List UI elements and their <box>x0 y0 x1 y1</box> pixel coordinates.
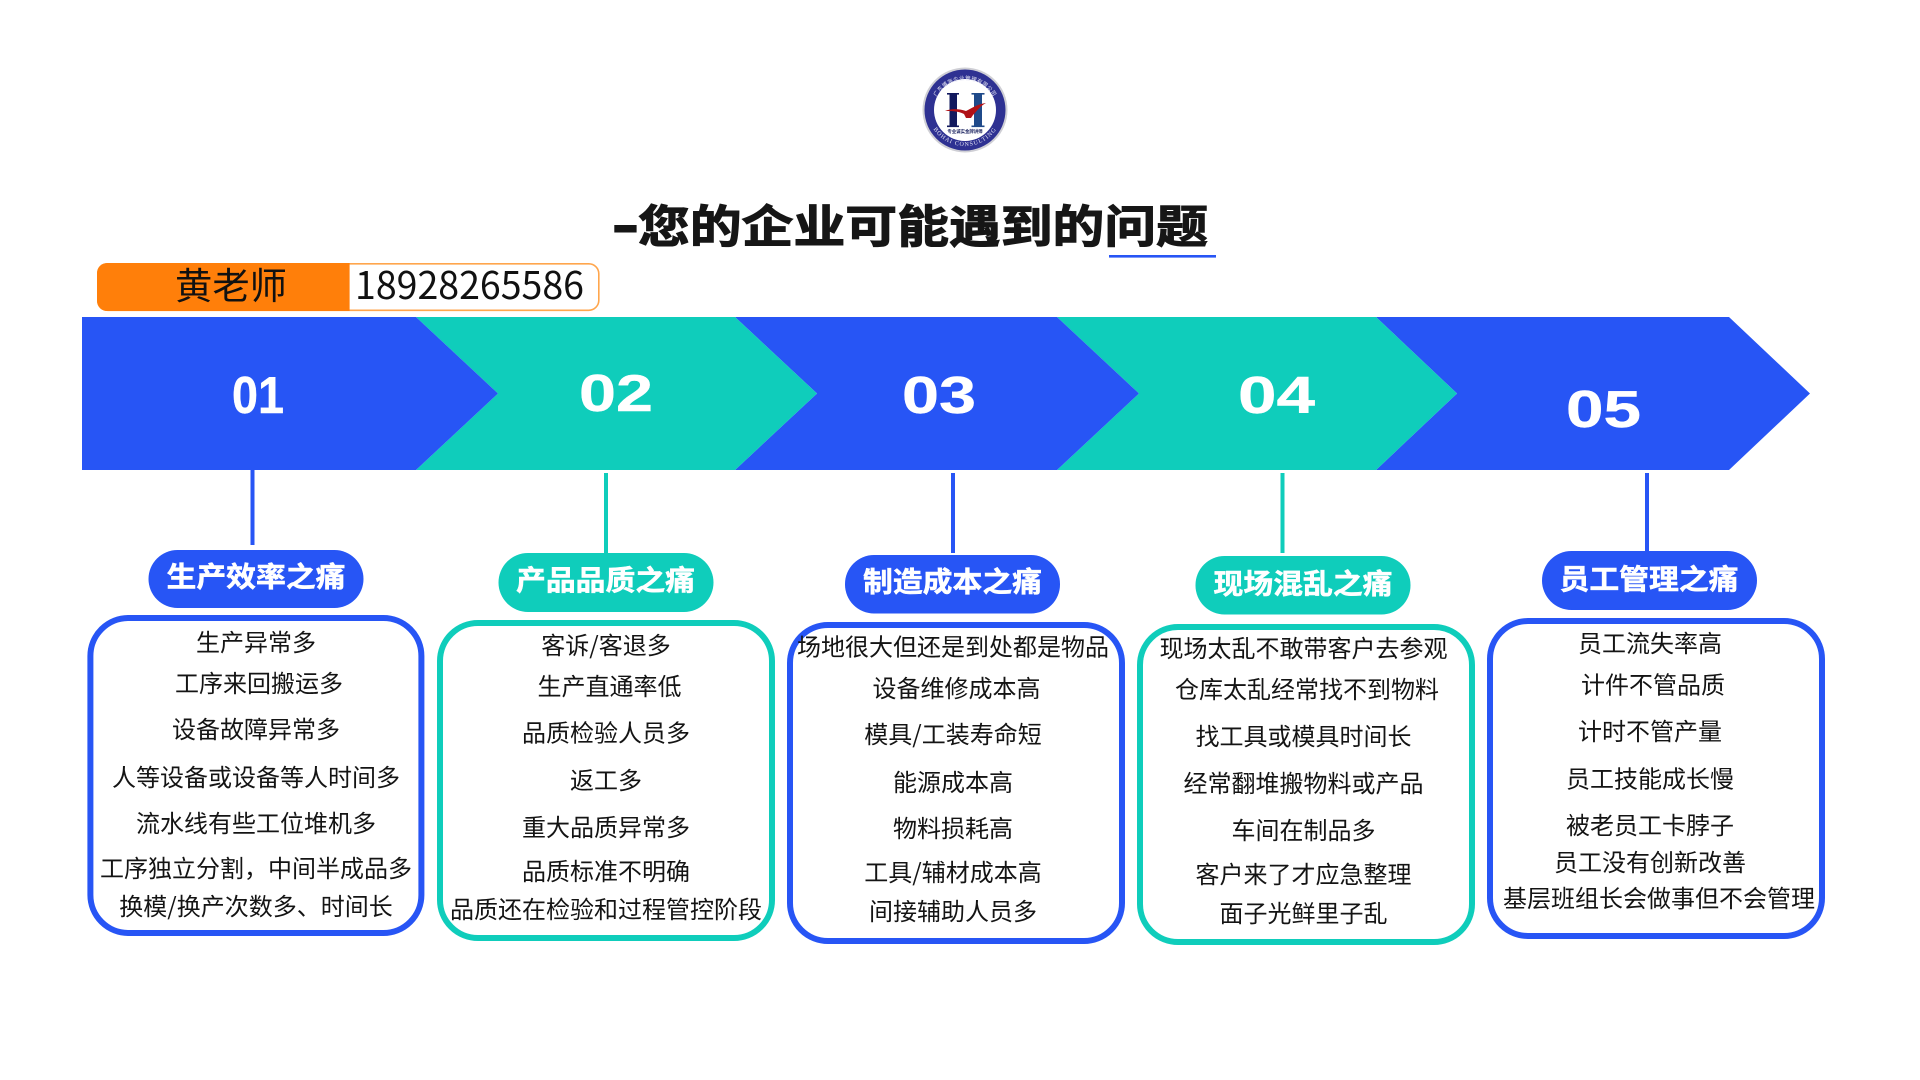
heading pill 5: 员工管理之痛 <box>1560 558 1738 598</box>
list panel 2: 品质检验人员多 <box>522 714 690 748</box>
list panel 2: 返工多 <box>570 761 642 796</box>
list panel 4: 找工具或模具时间长 <box>1196 717 1412 752</box>
list panel 3: 能源成本高 <box>893 763 1013 798</box>
list panel 3: 间接辅助人员多 <box>869 892 1037 927</box>
heading pill 4: 现场混乱之痛 <box>1214 562 1392 602</box>
list panel 5: 员工技能成长慢 <box>1566 760 1734 794</box>
list panel 5: 计件不管品质 <box>1581 666 1725 700</box>
column 1: production efficiency <box>90 470 421 933</box>
title: - <box>613 199 638 251</box>
list panel 2: 生产直通率低 <box>538 667 682 702</box>
list panel 5 <box>1490 621 1822 936</box>
list panel 2: 品质还在检验和过程管控阶段 <box>450 890 762 925</box>
connector 3 <box>951 473 955 553</box>
number 03: 03 <box>902 367 976 425</box>
list panel 3: 工具/辅材成本高 <box>864 853 1042 888</box>
number 04: 04 <box>1238 367 1315 425</box>
connector 1 <box>250 470 254 545</box>
list panel 1: 工序来回搬运多 <box>175 664 343 699</box>
chevron banner <box>82 317 1810 470</box>
list panel 5: 被老员工卡脖子 <box>1566 806 1734 841</box>
list panel 5: 计时不管产量 <box>1578 712 1722 747</box>
list panel 3: 设备维修成本高 <box>872 669 1040 704</box>
heading pill 3: 制造成本之痛 <box>863 560 1042 600</box>
heading pill 3 <box>845 555 1060 614</box>
list panel 2: 品质标准不明确 <box>522 852 690 887</box>
list panel 4: 客户来了才应急整理 <box>1196 855 1412 890</box>
list panel 1: 工序独立分割，中间半成品多 <box>100 849 412 884</box>
contact bar <box>97 255 599 311</box>
list panel 4: 车间在制品多 <box>1232 811 1376 846</box>
heading pill 4 <box>1196 556 1410 614</box>
list panel 4 <box>1140 627 1472 942</box>
logo: Bohai Consulting round emblem: 广东博海企业管理有限公司 <box>934 75 997 96</box>
chevron 05 <box>1376 317 1810 470</box>
connector 4 <box>1280 473 1284 553</box>
logo: Bohai Consulting round emblem: BOHAI CONSULTING <box>934 126 996 146</box>
list panel 2: 客诉/客退多 <box>541 626 671 661</box>
heading pill 5 <box>1542 551 1757 610</box>
heading pill 1: 生产效率之痛 <box>166 556 346 596</box>
logo: Bohai Consulting round emblem: 专业诚实金牌讲师 <box>947 128 983 135</box>
list panel 2 <box>440 623 772 938</box>
list panel 1: 设备故障异常多 <box>172 710 340 745</box>
chevron 03 <box>735 317 1139 470</box>
list panel 4: 现场太乱不敢带客户去参观 <box>1160 629 1448 664</box>
chevron 01 <box>82 317 498 470</box>
list panel 4: 仓库太乱经常找不到物料 <box>1175 670 1439 705</box>
chevron 02 <box>416 317 817 470</box>
list panel 3 <box>790 625 1122 941</box>
logo: Bohai Consulting round emblem <box>922 68 1008 152</box>
list panel 1 <box>90 618 421 933</box>
number 05: 05 <box>1566 381 1641 439</box>
list panel 5: 员工流失率高 <box>1578 624 1722 659</box>
column 4: site disorder <box>1140 473 1472 942</box>
title: 您的企业可能遇到的问题 <box>638 190 1208 256</box>
list panel 4: 经常翻堆搬物料或产品 <box>1184 764 1424 799</box>
column 2: product quality <box>440 473 772 938</box>
list panel 1: 流水线有些工位堆机多 <box>136 804 376 839</box>
contact bar: 黄老师 <box>175 256 287 310</box>
list panel 5: 基层班组长会做事但不会管理 <box>1503 879 1815 914</box>
connector 5 <box>1645 473 1649 551</box>
contact bar: 18928265586 <box>355 255 584 310</box>
column 5: staff management <box>1490 473 1822 936</box>
list panel 3: 模具/工装寿命短 <box>864 715 1042 750</box>
list panel 1: 生产异常多 <box>196 623 316 658</box>
number 02: 02 <box>579 365 653 423</box>
connector 2 <box>604 473 608 553</box>
list panel 1: 人等设备或设备等人时间多 <box>112 758 400 793</box>
list panel 2: 重大品质异常多 <box>522 808 690 843</box>
heading pill 2: 产品品质之痛 <box>516 559 695 599</box>
heading pill 2 <box>498 553 714 612</box>
list panel 4: 面子光鲜里子乱 <box>1220 894 1388 929</box>
title underline accent <box>1109 255 1216 258</box>
column 3: manufacturing cost <box>790 473 1122 941</box>
chevron 04 <box>1057 317 1457 470</box>
heading pill 1 <box>148 550 364 608</box>
list panel 5: 员工没有创新改善 <box>1554 843 1746 878</box>
list panel 3: 物料损耗高 <box>893 809 1013 844</box>
list panel 1: 换模/换产次数多、时间长 <box>119 887 393 922</box>
list panel 3: 场地很大但还是到处都是物品 <box>797 628 1109 662</box>
number 01: 01 <box>232 367 284 425</box>
